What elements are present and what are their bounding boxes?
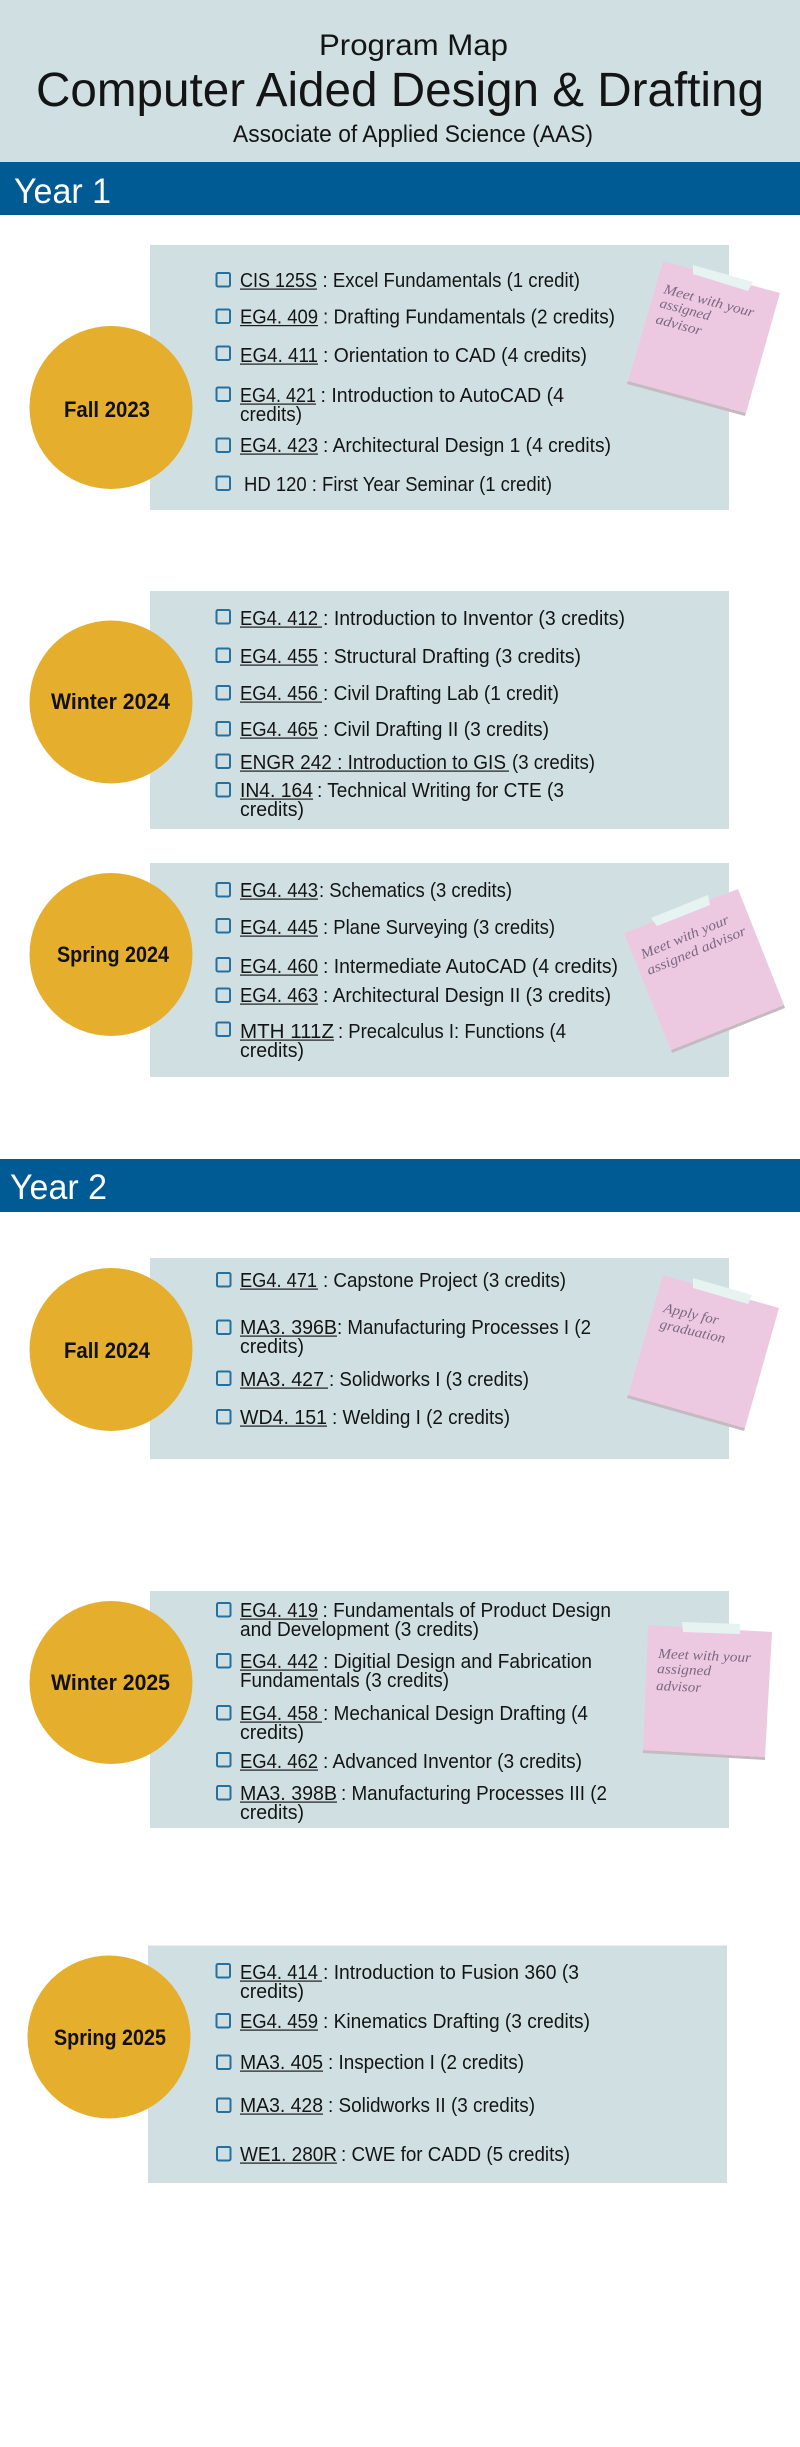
course: EG4. 419: EG4. 419 bbox=[240, 1600, 318, 1622]
course: EG4. 458: EG4. 458 bbox=[240, 1703, 318, 1725]
course: MA3. 405: MA3. 405 bbox=[240, 2052, 323, 2074]
course: EG4. 443: : Schematics (3 credits) bbox=[319, 880, 512, 902]
course: MA3. 398B bbox=[217, 1783, 607, 1824]
course: EG4. 459: : Kinematics Drafting (3 credits) bbox=[323, 2011, 590, 2033]
course: EG4. 465: EG4. 465 bbox=[240, 719, 318, 741]
sticky note: meet with advisor: assigned bbox=[658, 296, 713, 325]
course: EG4. 458: : Mechanical Design Drafting (4 bbox=[323, 1703, 588, 1725]
course: MTH 111Z bbox=[216, 1021, 566, 1062]
course: EG4. 459: EG4. 459 bbox=[240, 2011, 318, 2033]
course: EG4. 421: : Introduction to AutoCAD (4 bbox=[320, 385, 564, 407]
course: MA3. 396B: : Manufacturing Processes I (2 bbox=[337, 1317, 591, 1339]
course: MA3. 427 bbox=[217, 1369, 529, 1391]
course: EG4. 412: : Introduction to Inventor (3 credits) bbox=[323, 608, 625, 630]
course: EG4. 442 bbox=[217, 1651, 592, 1692]
sticky note: apply for graduation: graduation bbox=[658, 1317, 727, 1347]
course: EG4. 443 bbox=[216, 880, 512, 902]
course: EG4. 419 bbox=[217, 1600, 611, 1641]
term circle: spring 2024: Spring 2024 bbox=[57, 942, 170, 967]
panel: fall 2023 bbox=[30, 245, 780, 510]
course: EG4. 414 bbox=[216, 1962, 579, 2003]
course: MA3. 427: : Solidworks I (3 credits) bbox=[329, 1369, 529, 1391]
course: EG4. 419: and Development (3 credits) bbox=[240, 1619, 479, 1641]
course: EG4. 421 bbox=[216, 385, 564, 426]
header panel bbox=[0, 0, 800, 162]
sticky note: meet with advisor bbox=[627, 261, 780, 416]
course: ENGR 242: ENGR 242 : Introduction to GIS bbox=[240, 752, 506, 774]
course: WE1. 280R: : CWE for CADD (5 credits) bbox=[341, 2144, 570, 2166]
course: WD4. 151 bbox=[217, 1407, 510, 1429]
course: EG4. 455: EG4. 455 bbox=[240, 646, 318, 668]
term circle: fall 2024 bbox=[30, 1268, 192, 1431]
term circle: fall 2023 bbox=[30, 326, 192, 489]
course: WE1. 280R bbox=[217, 2144, 570, 2166]
course: MTH 111Z: : Precalculus I: Functions (4 bbox=[338, 1021, 566, 1043]
heading bar: year 1: Year 1 bbox=[14, 172, 111, 211]
course: EG4. 463: EG4. 463 bbox=[240, 985, 318, 1007]
subtitle: Associate of Applied Science (AAS) bbox=[233, 121, 593, 148]
course: EG4. 414: : Introduction to Fusion 360 (3 bbox=[323, 1962, 579, 1984]
term circle: fall 2023: Fall 2023 bbox=[64, 397, 150, 422]
course: MA3. 405: : Inspection I (2 credits) bbox=[328, 2052, 524, 2074]
course: MA3. 398B: credits) bbox=[240, 1802, 304, 1824]
term circle: winter 2024: Winter 2024 bbox=[51, 689, 171, 714]
course: MTH 111Z: MTH 111Z bbox=[240, 1021, 334, 1043]
course: EG4. 442: Fundamentals (3 credits) bbox=[240, 1670, 449, 1692]
course: EG4. 443: EG4. 443 bbox=[240, 880, 318, 902]
course: EG4. 409: : Drafting Fundamentals (2 credits) bbox=[323, 306, 615, 328]
course: CIS 125S: CIS 125S bbox=[240, 270, 317, 292]
course: EG4. 465 bbox=[216, 719, 549, 741]
sticky note: meet with advisor: advisor bbox=[656, 1679, 702, 1696]
sticky note: apply for graduation bbox=[627, 1275, 779, 1431]
course: EG4. 462: EG4. 462 bbox=[240, 1751, 318, 1773]
course: MA3. 428 bbox=[217, 2095, 535, 2117]
course: EG4. 411 bbox=[216, 345, 587, 367]
course: EG4. 421: credits) bbox=[240, 404, 302, 426]
sticky note: meet with advisor: assigned advisor bbox=[645, 924, 749, 979]
course: EG4. 414: credits) bbox=[240, 1981, 304, 2003]
course: MA3. 396B: credits) bbox=[240, 1336, 304, 1358]
course: EG4. 442: : Digitial Design and Fabrication bbox=[323, 1651, 592, 1673]
term circle: winter 2025: Winter 2025 bbox=[51, 1670, 170, 1695]
course: ENGR 242: (3 credits) bbox=[512, 752, 595, 774]
panel: spring 2024 bbox=[30, 863, 785, 1077]
course: EG4. 471: EG4. 471 bbox=[240, 1270, 317, 1292]
sticky note: meet with advisor: Meet with your bbox=[657, 1647, 752, 1666]
course: EG4. 412: EG4. 412 bbox=[240, 608, 318, 630]
course: EG4. 445: EG4. 445 bbox=[240, 917, 318, 939]
course: MA3. 405 bbox=[217, 2052, 524, 2074]
course: EG4. 419: : Fundamentals of Product Design bbox=[322, 1600, 611, 1622]
term circle: fall 2024: Fall 2024 bbox=[64, 1338, 151, 1363]
course: MTH 111Z: credits) bbox=[240, 1040, 304, 1062]
course: MA3. 428: : Solidworks II (3 credits) bbox=[328, 2095, 535, 2117]
course: IN4. 164: credits) bbox=[240, 799, 304, 821]
panel: fall 2024 bbox=[30, 1258, 779, 1459]
heading bar: year 1 bbox=[0, 162, 800, 215]
course: EG4. 458 bbox=[217, 1703, 588, 1744]
course: EG4. 462: : Advanced Inventor (3 credits) bbox=[323, 1751, 582, 1773]
course: EG4. 442: EG4. 442 bbox=[240, 1651, 318, 1673]
course: EG4. 459 bbox=[216, 2011, 590, 2033]
course: MA3. 427: MA3. 427 bbox=[240, 1369, 324, 1391]
course: EG4. 445 bbox=[216, 917, 555, 939]
sticky note: meet with advisor bbox=[624, 889, 785, 1053]
course: IN4. 164: IN4. 164 bbox=[240, 780, 313, 802]
term circle: winter 2025 bbox=[30, 1601, 192, 1764]
course: EG4. 471: : Capstone Project (3 credits) bbox=[323, 1270, 566, 1292]
course: IN4. 164: : Technical Writing for CTE (3 bbox=[317, 780, 564, 802]
heading bar: year 2: Year 2 bbox=[10, 1168, 107, 1207]
course: CIS 125S bbox=[216, 270, 580, 292]
sticky note: meet with advisor: assigned bbox=[657, 1662, 713, 1679]
term circle: winter 2024 bbox=[30, 620, 192, 784]
course: EG4. 411: EG4. 411 bbox=[240, 345, 318, 367]
course: WD4. 151: : Welding I (2 credits) bbox=[332, 1407, 510, 1429]
sticky note: meet with advisor: advisor bbox=[654, 312, 704, 339]
course: EG4. 465: : Civil Drafting II (3 credits) bbox=[323, 719, 549, 741]
course: MA3. 428: MA3. 428 bbox=[240, 2095, 323, 2117]
course: EG4. 460: : Intermediate AutoCAD (4 credits) bbox=[323, 956, 618, 978]
term circle: spring 2025: Spring 2025 bbox=[54, 2025, 166, 2050]
title: Computer Aided Design & Drafting bbox=[36, 64, 764, 117]
course: CIS 125S: : Excel Fundamentals (1 credit) bbox=[322, 270, 580, 292]
course: EG4. 423: : Architectural Design 1 (4 credits) bbox=[323, 435, 611, 457]
sticky note: meet with advisor: Meet with your bbox=[661, 282, 756, 321]
heading: program map: Program Map bbox=[319, 29, 508, 62]
course: MA3. 396B: MA3. 396B bbox=[240, 1317, 337, 1339]
course: MA3. 396B bbox=[217, 1317, 591, 1358]
course: HD 120: HD 120 : First Year Seminar (1 credit) bbox=[244, 474, 552, 496]
panel: winter 2025 bbox=[30, 1591, 772, 1828]
course: IN4. 164 bbox=[216, 780, 564, 821]
course: EG4. 411: : Orientation to CAD (4 credits) bbox=[323, 345, 587, 367]
sticky note: meet with advisor bbox=[643, 1622, 772, 1760]
course: EG4. 423: EG4. 423 bbox=[240, 435, 318, 457]
course: EG4. 409: EG4. 409 bbox=[240, 306, 318, 328]
sticky note: apply for graduation: Apply for bbox=[661, 1301, 721, 1329]
course: EG4. 463: : Architectural Design II (3 credits) bbox=[323, 985, 611, 1007]
course: EG4. 456: EG4. 456 bbox=[240, 683, 318, 705]
course: EG4. 456 bbox=[216, 683, 559, 705]
course: EG4. 462 bbox=[217, 1751, 582, 1773]
course: EG4. 414: EG4. 414 bbox=[240, 1962, 318, 1984]
sticky note: meet with advisor: Meet with your bbox=[638, 913, 732, 963]
course: EG4. 458: credits) bbox=[240, 1722, 304, 1744]
course: EG4. 455 bbox=[216, 646, 581, 668]
course: WD4. 151: WD4. 151 bbox=[240, 1407, 327, 1429]
course: MA3. 398B: MA3. 398B bbox=[240, 1783, 337, 1805]
course: MA3. 398B: : Manufacturing Processes III (2 bbox=[341, 1783, 607, 1805]
course: EG4. 460: EG4. 460 bbox=[240, 956, 318, 978]
course: EG4. 456: : Civil Drafting Lab (1 credit) bbox=[323, 683, 559, 705]
course: EG4. 455: : Structural Drafting (3 credits) bbox=[323, 646, 581, 668]
panel: winter 2024 bbox=[30, 591, 729, 829]
heading bar: year 2 bbox=[0, 1159, 800, 1212]
course: EG4. 421: EG4. 421 bbox=[240, 385, 316, 407]
course: EG4. 471 bbox=[217, 1270, 566, 1292]
course: WE1. 280R: WE1. 280R bbox=[240, 2144, 337, 2166]
panel: spring 2025 bbox=[28, 1946, 727, 2183]
term circle: spring 2025 bbox=[28, 1956, 190, 2118]
course: EG4. 445: : Plane Surveying (3 credits) bbox=[323, 917, 555, 939]
term circle: spring 2024 bbox=[30, 873, 192, 1036]
